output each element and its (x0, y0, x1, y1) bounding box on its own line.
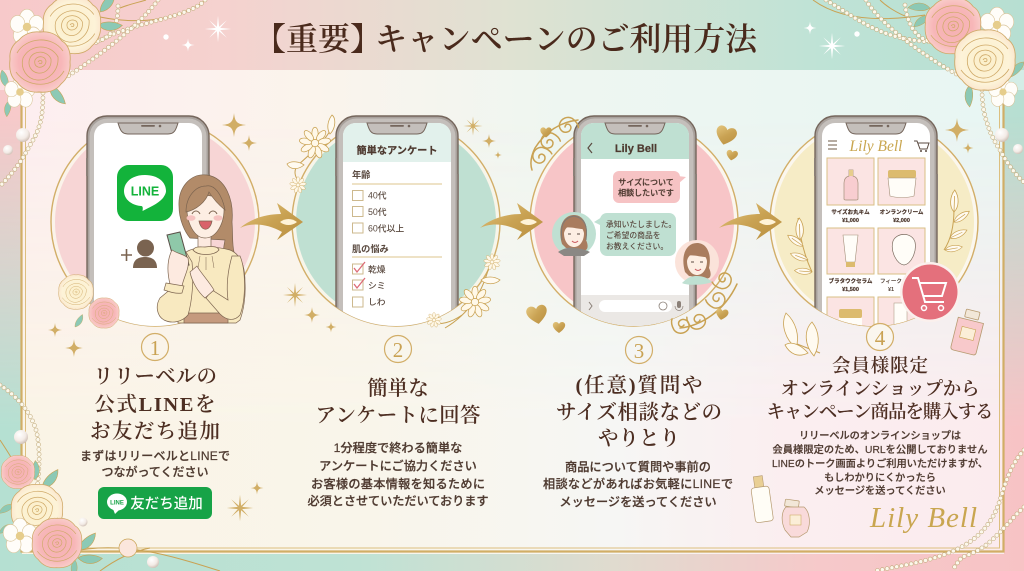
question: age: 年齢 (352, 169, 371, 180)
product labels: ¥1 (888, 287, 894, 293)
gold sparkles (48, 113, 257, 337)
phone with survey form (335, 115, 459, 326)
gold sparkles (945, 118, 974, 154)
product labels: サイズお丸キム (831, 208, 870, 216)
gold swirls (530, 114, 737, 335)
product labels: ¥1,000 (842, 218, 859, 224)
step 4 heading: 会員様限定 (832, 355, 928, 377)
step number 4 (866, 324, 894, 350)
question: skin concerns: 肌の悩み (352, 243, 389, 254)
step number 2: 2 (393, 338, 403, 362)
question: skin concerns: 乾燥 (368, 264, 386, 274)
step 3 heading: やりとり (598, 427, 680, 450)
chat header: Lily Bell (615, 143, 657, 155)
arrow 2 (480, 203, 543, 240)
step 2 description: お客様の基本情報を知るために (311, 476, 485, 491)
title: 重要 (286, 21, 351, 57)
step 4 heading (766, 355, 994, 423)
message input bar (581, 295, 689, 326)
step 1 heading (90, 366, 220, 443)
product labels: フィーク (880, 277, 902, 285)
circle: pink background (51, 118, 259, 326)
gold sparkles (65, 339, 264, 521)
icon: perfume bottle (950, 308, 986, 356)
phone with LINE icon (86, 115, 210, 326)
product labels: ¥2,000 (893, 218, 910, 224)
step number 3 (626, 336, 652, 364)
icon: shopping cart badge (900, 262, 960, 322)
circle: pink background (530, 118, 738, 326)
step 3 text (543, 336, 733, 509)
corner decoration: top left roses and pearls (0, 0, 206, 186)
step 1 illustration (48, 114, 260, 337)
question: age: 60代以上 (368, 222, 404, 234)
icon: LINE app (117, 165, 173, 221)
question: age: 50代 (368, 206, 387, 217)
step 2 description: 1分程度で終わる簡単な (334, 440, 462, 455)
title: キャンペーンのご利用方法 (375, 21, 759, 57)
product labels: オンランクリーム (880, 208, 924, 216)
illustration: woman using smartphone (157, 175, 245, 323)
step 2 description: 必須とさせていただいております (308, 494, 488, 508)
button: add friend: LINE (110, 500, 124, 506)
product labels (829, 208, 924, 293)
avatar: customer support agent left (552, 212, 596, 256)
step number 3: 3 (634, 339, 644, 363)
step 4 description: リリーベルのオンラインショップは (799, 430, 961, 442)
step 3 heading: (任意)質問や (576, 374, 702, 397)
title sparkles left (163, 16, 231, 52)
title sparkles right (804, 22, 860, 59)
step number 1: 1 (150, 336, 160, 360)
step 2 heading: 簡単な (367, 377, 429, 400)
gold hearts (525, 124, 738, 333)
step number 4: 4 (875, 326, 886, 350)
step 4 description: LINEのトーク画面よりご利用いただけますが、 (772, 457, 988, 470)
step 4 illustration (770, 115, 984, 357)
corner decoration: bottom left roses and pearls (0, 385, 220, 571)
gold flowers (287, 115, 500, 328)
question: skin concerns: しわ (368, 297, 386, 307)
button: add friend (98, 487, 212, 519)
circle: yellow background (770, 118, 978, 326)
arrow 3 (719, 203, 782, 240)
cosmetic bottles (749, 475, 809, 537)
step 3 description (543, 459, 733, 509)
step 3 heading: サイズ相談などの (556, 401, 722, 424)
step 4 description: メッセージを送ってください (814, 484, 946, 497)
arrow 1 (240, 203, 303, 240)
button: add friend: 友だち追加 (130, 496, 203, 512)
survey heading: 簡単なアンケート (356, 144, 438, 157)
step 4 description: 会員様限定のため、URLを公開しておりません (772, 443, 988, 456)
title: 【 (254, 21, 286, 57)
step 1 heading: お友だち追加 (90, 420, 220, 443)
step 4 heading: キャンペーン商品を購入する (766, 402, 994, 423)
step 2 description: アンケートにご協力ください (319, 458, 477, 473)
title: 】 (350, 21, 382, 57)
gold leaf sprig bottom (784, 313, 820, 356)
step number 1 (142, 334, 168, 360)
circle: mint background (292, 118, 500, 326)
roses by phone (59, 275, 119, 328)
step 4 description: もしわかりにくかったら (824, 472, 936, 484)
gold leaf sprigs (786, 190, 971, 275)
step 1 description: まずはリリーベルとLINEで (80, 449, 230, 463)
chat bubble: customer: 相談したいです (618, 188, 674, 198)
step 3 illustration (526, 115, 739, 334)
phone with chat (573, 115, 697, 326)
step 2 description (308, 440, 488, 508)
step 4 text (749, 324, 994, 537)
step 1 heading: リリーベルの (93, 366, 217, 388)
chat bubble: staff: 承知いたしました。 (606, 219, 676, 229)
chat bubble: staff: ご希望の商品を (606, 230, 661, 240)
corner decoration: bottom right pearls (875, 450, 1024, 571)
step 4 description (772, 430, 988, 497)
question: age (352, 169, 442, 234)
product labels: ¥1,500 (842, 287, 859, 293)
chat bubble: customer: サイズについて (618, 177, 674, 187)
step 2 illustration (284, 114, 502, 332)
shop logo: Lily Bell (849, 138, 902, 155)
icon: add friend (121, 240, 157, 268)
icon: LINE app: LINE (131, 184, 159, 198)
chat bubble: customer (613, 171, 686, 203)
avatar: customer support agent right (675, 240, 719, 285)
question: age: 40代 (368, 190, 387, 200)
corner decoration: top right roses and pearls (813, 0, 1024, 182)
gold double frame (22, 78, 1004, 552)
step 1 description: つながってください (101, 464, 209, 479)
step 2 heading: アンケートに回答 (316, 404, 481, 427)
step number 2 (384, 336, 412, 362)
step 1 heading: 公式LINEを (94, 393, 216, 416)
product labels: ブラタウクセラム (829, 277, 873, 285)
gold sparkles (283, 116, 502, 333)
step 2 heading (316, 377, 481, 427)
step 2 text (308, 336, 488, 508)
chat bubble: staff: お教えください。 (606, 241, 668, 251)
step 3 description: 相談などがあればお気軽にLINEで (543, 476, 733, 491)
step 1 text (65, 334, 264, 521)
product tiles (827, 158, 925, 337)
step 1 description (80, 449, 230, 479)
step 3 description: メッセージを送ってください (559, 494, 717, 509)
step 3 heading (556, 374, 722, 450)
question: skin concerns: シミ (368, 280, 386, 290)
brand signature: Lily Bell (869, 502, 977, 534)
step 4 heading: オンラインショップから (780, 379, 980, 400)
chat bubble: staff (594, 213, 676, 256)
step 3 description: 商品について質問や事前の (565, 459, 711, 474)
phone with online shop (814, 115, 938, 326)
question: skin concerns (352, 243, 442, 307)
